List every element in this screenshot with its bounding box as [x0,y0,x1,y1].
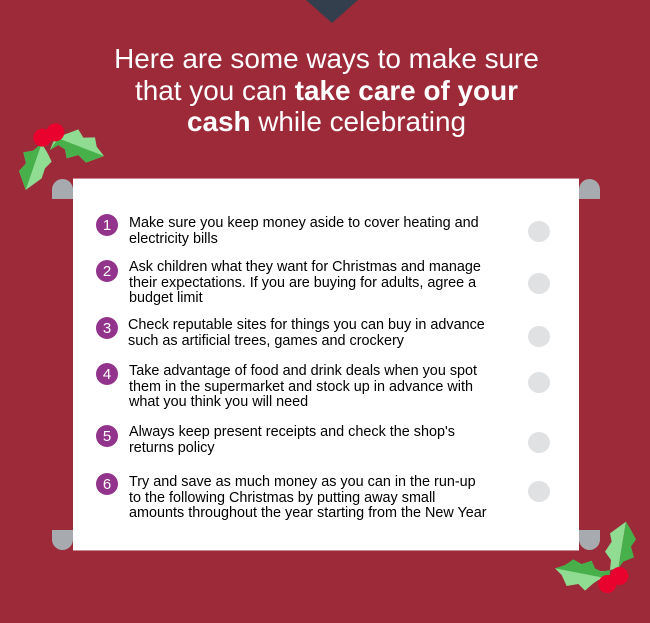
item 3 text [128,317,485,349]
title: Here are some ways to make sure [114,43,539,74]
scroll corner top right [579,179,600,199]
item 1 text: electricity bills [129,231,218,247]
item 5 text [129,424,455,456]
item 5 number: 5 [103,428,111,445]
item 3 number [96,317,118,339]
item 4 text: Take advantage of food and drink deals when you spot [129,363,477,379]
icon: holly bottom right [555,522,636,593]
item 5 text: returns policy [129,440,215,456]
item 2 text [129,259,481,306]
item 6 checkbox [528,481,550,502]
item 2 number [96,260,118,282]
item 6 number: 6 [103,476,111,493]
title [114,43,539,137]
item 2 text: Ask children what they want for Christmas and manage [129,259,481,275]
item 1 checkbox [528,221,550,242]
item 1 number [96,214,118,236]
item 2 checkbox [528,273,550,294]
item 3 text: Check reputable sites for things you can buy in advance [128,317,485,333]
white sheet [73,179,579,550]
title: cash while celebrating [187,106,466,137]
item 1 text [129,215,479,247]
item 4 number [96,363,118,385]
item 4 text: what you think you will need [129,394,308,410]
item 4 number: 4 [103,366,111,383]
item 2 text: budget limit [129,290,203,306]
item 4 text [129,363,477,410]
scroll corner bottom right [579,530,600,550]
item 6 text: to the following Christmas by putting away small [129,490,435,506]
item 6 text [129,474,487,521]
item 5 number [96,425,118,447]
item 3 checkbox [528,326,550,347]
item 6 number [96,473,118,495]
title: that you can take care of your [135,74,518,106]
item 6 text: amounts throughout the year starting from the New Year [129,505,487,521]
item 1 text: Make sure you keep money aside to cover heating and [129,215,479,231]
icon: holly top left [19,123,104,190]
scroll corner bottom left [52,530,73,550]
item 3 text: such as artificial trees, games and crockery [128,333,404,349]
item 6 text: Try and save as much money as you can in the run-up [129,474,476,490]
item 1 number: 1 [103,217,111,234]
item 4 text: them in the supermarket and stock up in advance with [129,379,473,395]
panel: checklist scroll [52,178,600,551]
item 2 number: 2 [103,263,111,280]
item 4 checkbox [528,372,550,393]
item 2 text: their expectations. If you are buying for adults, agree a [129,275,476,291]
item 3 number: 3 [103,320,111,337]
item 5 checkbox [528,432,550,453]
scroll corner top left [52,179,73,199]
item 5 text: Always keep present receipts and check the shop's [129,424,455,440]
icon: top arrow [306,0,358,23]
